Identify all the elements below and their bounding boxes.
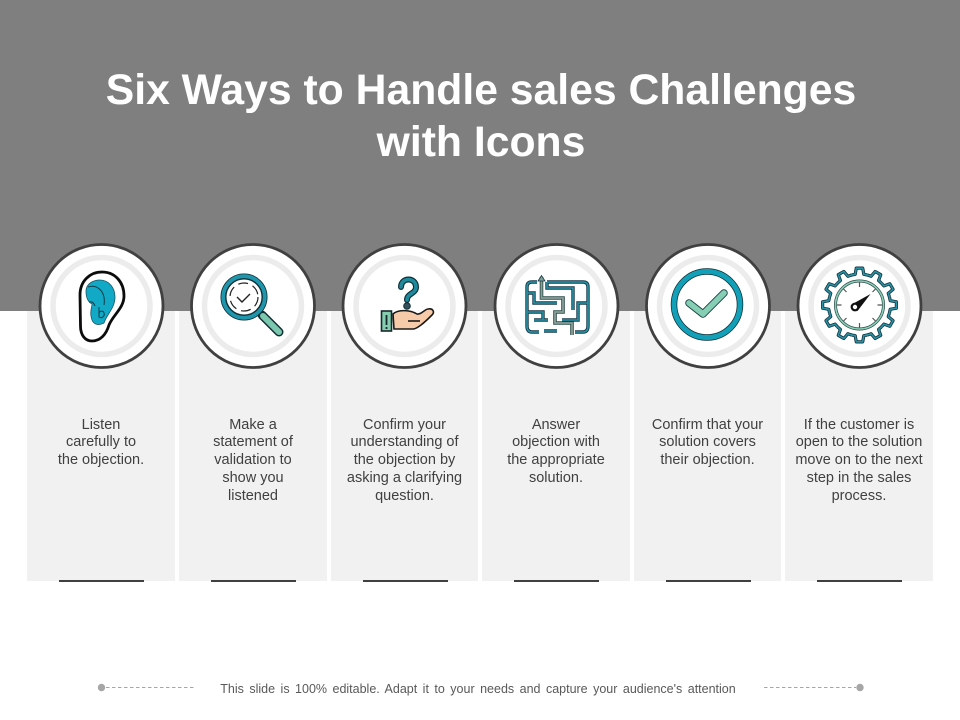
circle icon: check mark <box>646 244 770 368</box>
panel: confirm solution: Confirm that your <box>652 416 763 432</box>
circle icon: hand with question <box>343 244 466 368</box>
panel: confirm solution <box>634 311 781 581</box>
circle icon: maze <box>495 244 618 368</box>
panel: confirm understanding: understanding of <box>350 434 459 450</box>
panel: move on <box>785 311 933 581</box>
panel: confirm solution: solution covers <box>659 434 756 450</box>
panel: confirm understanding: question. <box>375 488 434 504</box>
panel: statement: Make a <box>229 416 277 432</box>
title: with Icons <box>377 118 585 166</box>
panel: answer: objection with <box>512 434 600 450</box>
panel: move on: process. <box>832 488 886 504</box>
footer ornament: right <box>764 684 864 691</box>
panel: answer: solution. <box>529 470 583 486</box>
footer ornament: left <box>98 684 195 691</box>
panel: answer: the appropriate <box>507 452 605 468</box>
panel: statement: show you <box>222 470 284 486</box>
panel: statement: listened <box>228 488 278 504</box>
panel: answer <box>482 311 630 581</box>
panel: confirm solution: their objection. <box>660 452 755 468</box>
circle icon: ear <box>40 244 163 368</box>
circle icon: gear gauge <box>798 244 921 368</box>
panel: listen <box>27 311 175 581</box>
title: Six Ways to Handle sales Challenges <box>106 66 856 114</box>
panel: statement: validation to <box>214 452 292 468</box>
panel: move on: step in the sales <box>807 470 911 486</box>
panel: listen: Listen <box>82 416 120 432</box>
panel: confirm understanding: the objection by <box>354 452 455 468</box>
circle icon: magnifier <box>192 244 314 368</box>
panel: answer: Answer <box>532 416 580 432</box>
panel: move on: If the customer is <box>804 416 914 432</box>
panel: confirm understanding <box>331 311 478 581</box>
panel: confirm understanding: asking a clarifying <box>347 470 462 486</box>
panel: move on: move on to the next <box>795 452 923 468</box>
title <box>106 66 856 166</box>
panel: listen: the objection. <box>58 452 144 468</box>
panel: listen: carefully to <box>66 434 136 450</box>
header band <box>0 0 960 311</box>
panel: statement <box>179 311 327 581</box>
panel: confirm understanding: Confirm your <box>363 416 446 432</box>
panel: statement: statement of <box>213 434 293 450</box>
footer text: This slide is 100% editable. Adapt it to your needs and capture your audience's attention <box>220 682 736 696</box>
panel: move on: open to the solution <box>796 434 922 450</box>
